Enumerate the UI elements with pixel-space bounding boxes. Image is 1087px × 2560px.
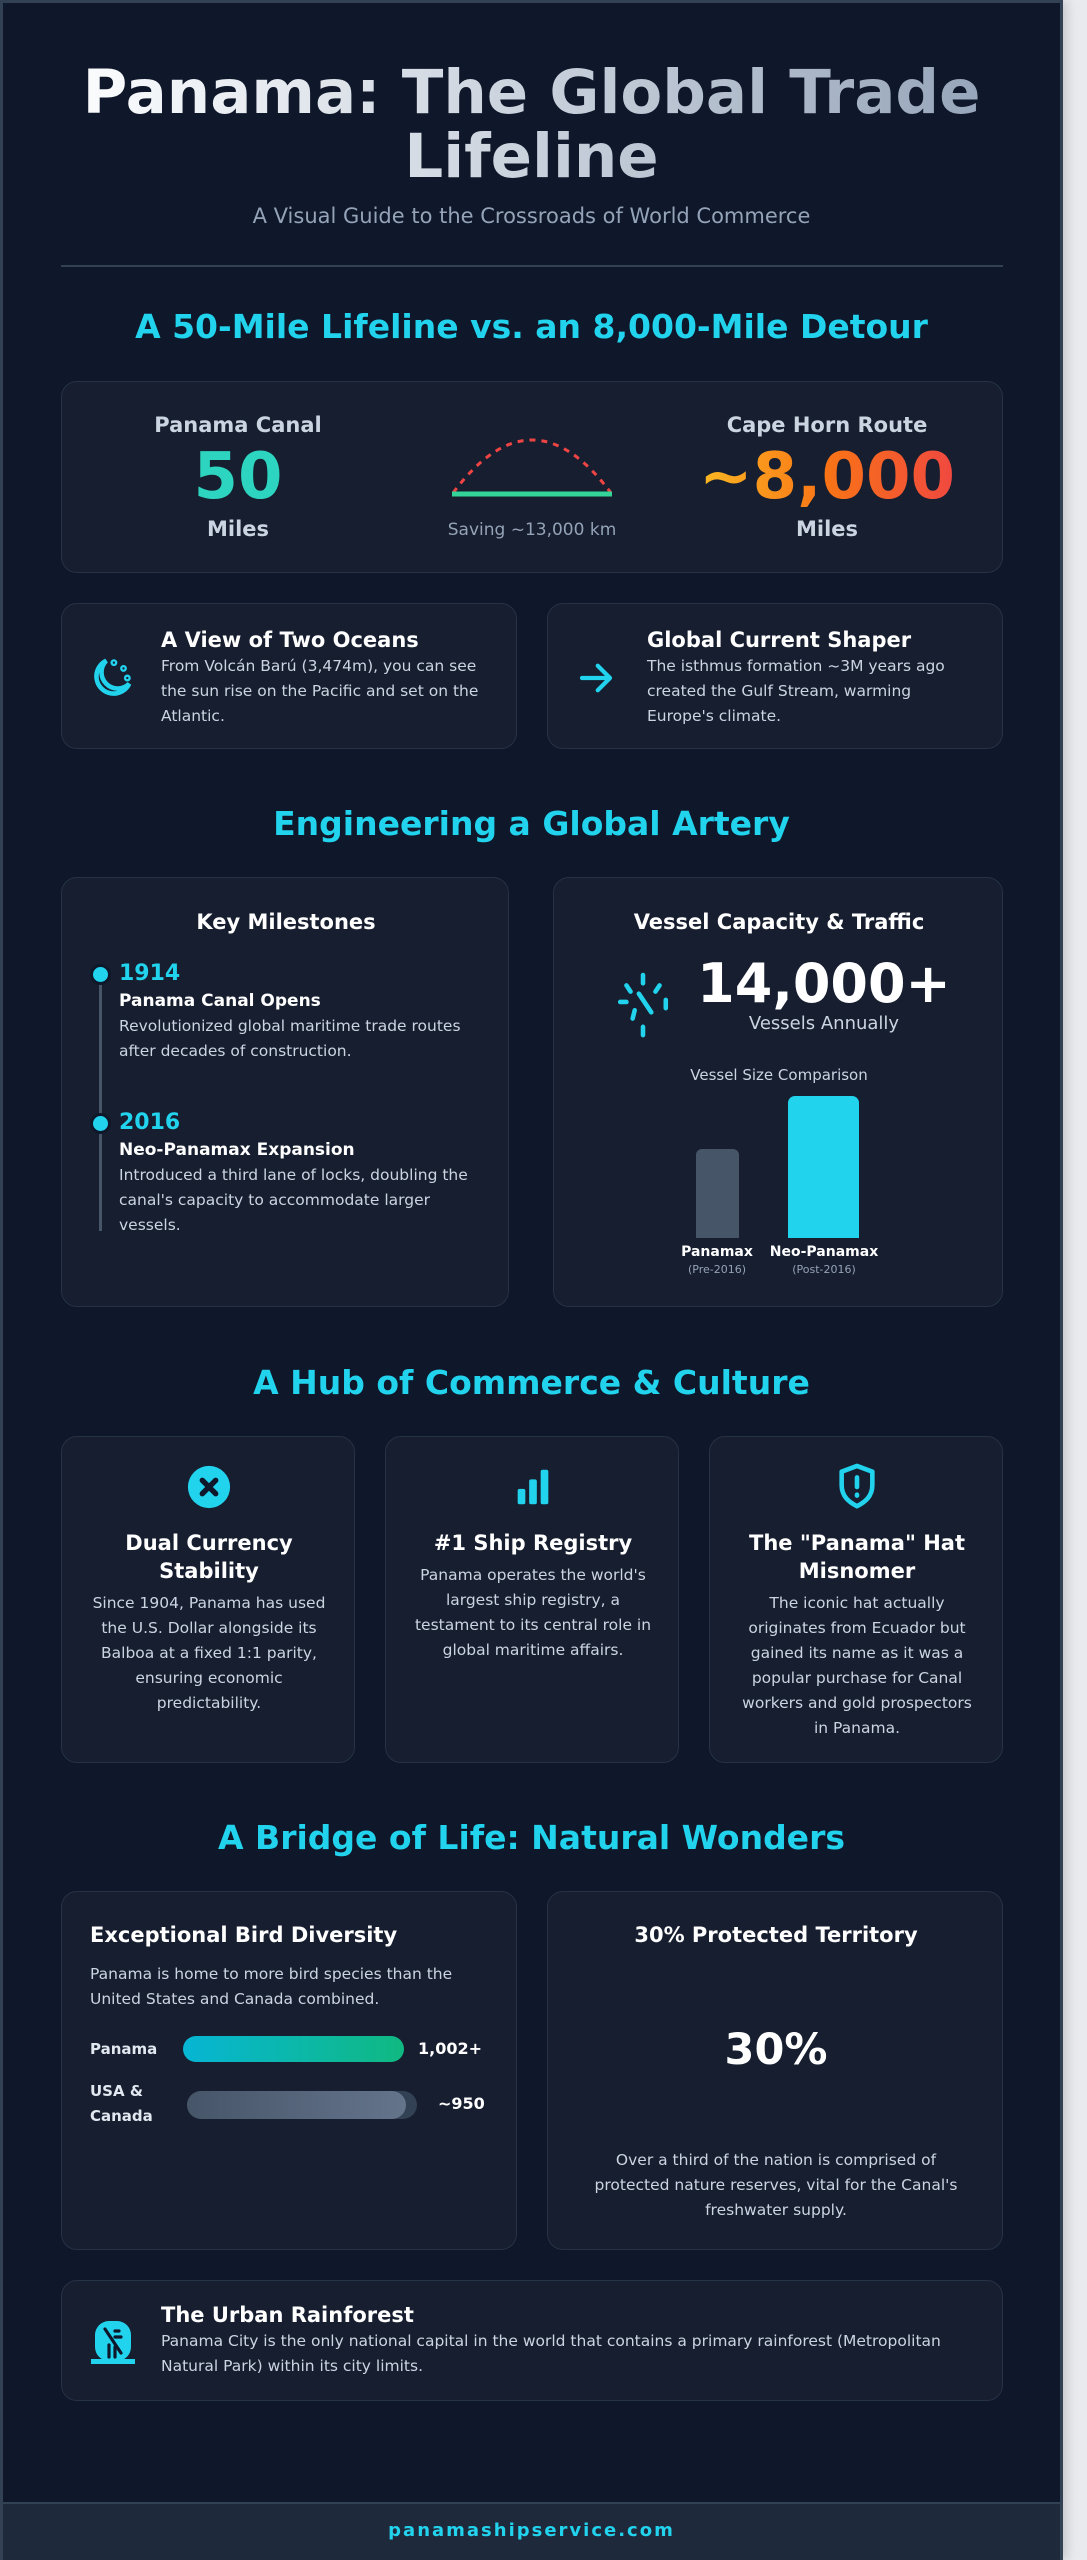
cape horn stat [699,413,955,541]
icon: rainforest [91,2321,135,2364]
icon: arrow [580,664,612,692]
milestone 1914 [93,961,461,1060]
bar chart: vessel size: (Post-2016) [792,1263,856,1276]
panel: currency: Since 1904, Panama has used the U.S. Dollar alongside its Balboa at a fixed 1:1 parity, ensuring economic predictability. [93,1594,325,1712]
panel: milestones [61,877,509,1307]
milestone 1914: Panama Canal Opens [119,991,321,1011]
text: Panama is home to more bird species than the United States and Canada combined. [90,1965,452,2008]
milestone 2016: Neo-Panamax Expansion [119,1140,355,1160]
text: From Volcán Barú (3,474m), you can see the sun rise on the Pacific and set on the Atlantic. [161,657,478,725]
milestone 1914: 1914 [119,961,180,986]
title: Panama: The Global Trade [83,57,980,128]
panama canal stat: Miles [207,517,269,541]
panel: ship registry [385,1436,679,1763]
icon: shield [839,1464,875,1508]
panel: ship registry: Panama operates the world's largest ship registry, a testament to its central role in global maritime affairs. [415,1566,651,1659]
panama canal stat [154,413,322,541]
heading: Vessel Capacity & Traffic [634,910,924,934]
panel: bird diversity [61,1891,517,2250]
icon: x circle [188,1466,230,1508]
cape horn stat: ~8,000 [699,440,955,514]
panel: protected territory [547,1891,1003,2250]
title [0,61,1063,189]
bar chart: vessel size: (Pre-2016) [688,1263,746,1276]
panel: currency: Dual Currency Stability [125,1531,293,1583]
bar: panama: Panama [90,2040,157,2058]
icon: moon [94,658,132,696]
icon: bar chart [518,1470,548,1504]
milestone 2016 [93,1110,468,1234]
panel: ship registry: #1 Ship Registry [434,1531,632,1555]
panama canal stat: 50 [193,440,283,514]
text [646,628,945,725]
bar chart: vessel size: Neo-Panamax [770,1244,878,1260]
milestone 2016: Introduced a third lane of locks, doubling the canal's capacity to accommodate larger vessels. [119,1166,468,1234]
footer: panamashipservice.com [388,2520,675,2541]
bar chart: vessel size [681,1066,878,1276]
stat: 30% [725,2025,827,2075]
milestone 2016: 2016 [119,1110,180,1135]
text: Over a third of the nation is comprised of protected nature reserves, vital for the Canal's freshwater supply. [595,2151,957,2219]
text [161,2303,941,2375]
text: The Urban Rainforest [161,2303,414,2327]
stat: 14000: 14,000+ [697,952,951,1015]
bar: panama: 1,002+ [418,2039,482,2058]
subtitle: A Visual Guide to the Crossroads of World Commerce [253,204,810,228]
icon: sparkle wand [618,972,668,1038]
bar: usa canada: ~950 [438,2094,485,2113]
panel: panama hat: The iconic hat actually originates from Ecuador but gained its name as it was a popular purchase for Canal workers and gold prospectors in Panama. [742,1594,972,1737]
footer [3,2502,1060,2560]
bar: usa canada [90,2082,485,2125]
bar chart: vessel size: Panamax [681,1244,753,1260]
text: Panama City is the only national capital in the world that contains a primary rainforest (Metropolitan Natural Park) within its city limits. [161,2332,941,2375]
title: Lifeline [404,121,659,192]
bar: usa canada: Canada [90,2107,153,2125]
heading: 30% Protected Territory [634,1923,918,1947]
bar chart: vessel size: Vessel Size Comparison [690,1066,868,1084]
text: A View of Two Oceans [161,628,419,652]
text: The isthmus formation ~3M years ago created the Gulf Stream, warming Europe's climate. [647,657,945,725]
heading: hub: A Hub of Commerce & Culture [253,1363,810,1402]
cape horn stat: Cape Horn Route [727,413,927,437]
heading: route comparison: A 50-Mile Lifeline vs. an 8,000-Mile Detour [135,307,928,346]
saving caption: Saving ~13,000 km [448,520,616,540]
bar: usa canada: USA & [90,2082,143,2100]
milestone 1914: Revolutionized global maritime trade routes after decades of construction. [119,1017,461,1060]
panel: panama hat: The "Panama" Hat Misnomer [749,1531,965,1583]
bar: panama [90,2036,482,2062]
route diagram [452,438,612,496]
heading: natural wonders: A Bridge of Life: Natural Wonders [218,1818,845,1857]
panel: vessel capacity [553,877,1003,1307]
panel: current shaper [547,603,1003,749]
panel: urban rainforest [61,2280,1003,2401]
heading: Exceptional Bird Diversity [90,1923,397,1947]
caption: Vessels Annually [749,1013,899,1034]
panel: route comparison [61,381,1003,573]
panel: two oceans [61,603,517,749]
cape horn stat: Miles [796,517,858,541]
heading: Key Milestones [196,910,376,934]
panama canal stat: Panama Canal [154,413,322,437]
heading: engineering: Engineering a Global Artery [273,804,790,843]
text: Global Current Shaper [647,628,911,652]
panel: panama hat [709,1436,1003,1763]
panel: currency [61,1436,355,1763]
